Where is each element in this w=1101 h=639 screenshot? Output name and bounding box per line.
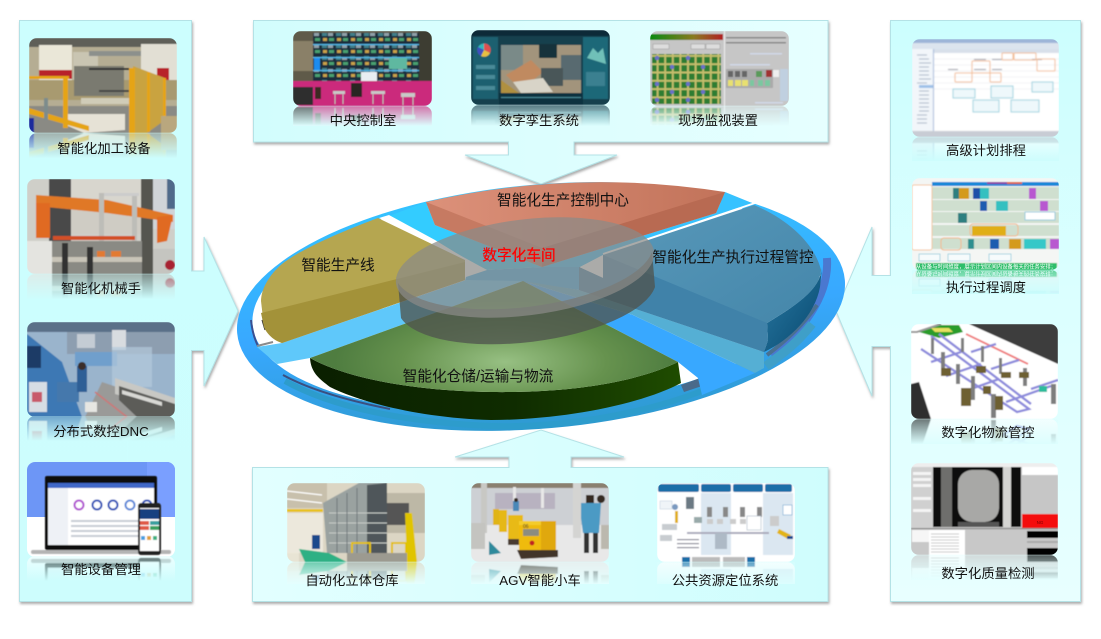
card: 智能化机械手 — [27, 179, 175, 369]
card: 智能设备管理 — [27, 462, 175, 639]
card: 分布式数控DNC — [27, 322, 175, 511]
card: 公共资源定位系统: 公共资源定位系统 — [672, 573, 778, 588]
card: AGV智能小车: AGV智能小车 — [499, 572, 581, 588]
card: 高级计划排程: 高级计划排程 — [946, 142, 1026, 158]
label: 智能化生产执行过程管控: 智能化生产执行过程管控 — [652, 248, 814, 266]
label: 智能化生产控制中心: 智能化生产控制中心 — [497, 191, 629, 209]
sector: 智能化生产控制中心 — [426, 182, 725, 267]
card: 数字化物流管控 — [911, 324, 1058, 514]
card: 执行过程调度 — [912, 178, 1059, 362]
sector: 智能化仓储/运输与物流 — [310, 281, 681, 420]
card: AGV智能小车 — [471, 483, 609, 639]
card: 现场监视装置: 现场监视装置 — [678, 113, 758, 128]
panel background with left arrow — [836, 20, 1080, 602]
sector: 智能生产线 — [261, 218, 465, 343]
panel: right digital systems — [836, 20, 1080, 639]
central cylinder — [390, 204, 660, 344]
label: 智能生产线: 智能生产线 — [301, 256, 375, 274]
cross bands between sectors — [257, 192, 764, 395]
sector: 智能化生产执行过程管控 — [579, 205, 822, 352]
disc base ring — [227, 158, 855, 455]
central diagram: digital workshop disc — [227, 158, 855, 455]
label: 智能化仓储/运输与物流: 智能化仓储/运输与物流 — [403, 367, 554, 385]
card: 智能化加工设备: 智能化加工设备 — [57, 140, 151, 156]
card: 数字化质量检测: 数字化质量检测 — [941, 566, 1035, 581]
card: 数字化质量检测 — [911, 463, 1058, 639]
card: 数字孪生系统: 数字孪生系统 — [499, 112, 579, 128]
card: 智能化加工设备 — [29, 38, 177, 228]
card: 中央控制室: 中央控制室 — [330, 112, 396, 128]
panel: top control center — [254, 20, 828, 184]
panel: left equipment — [20, 20, 238, 639]
card: 数字化物流管控: 数字化物流管控 — [941, 425, 1035, 440]
panel background with up arrow — [252, 430, 828, 602]
card: 高级计划排程 — [912, 39, 1059, 235]
card: 执行过程调度: 执行过程调度 — [946, 280, 1026, 295]
card: 智能化机械手: 智能化机械手 — [61, 281, 141, 296]
card: 现场监视装置 — [650, 31, 789, 181]
card: 自动化立体仓库: 自动化立体仓库 — [305, 573, 399, 588]
label: 数字化车间: 数字化车间 — [482, 247, 556, 264]
card: 中央控制室 — [293, 31, 432, 181]
card: 数字孪生系统 — [471, 30, 610, 180]
panel background with right arrow — [20, 20, 238, 602]
panel background with down arrow — [254, 20, 828, 184]
card: 公共资源定位系统 — [657, 483, 795, 639]
panel: bottom logistics — [252, 430, 828, 639]
card: 智能设备管理: 智能设备管理 — [61, 561, 141, 577]
card: 自动化立体仓库 — [287, 483, 425, 639]
card: 分布式数控DNC: 分布式数控DNC — [53, 424, 149, 439]
